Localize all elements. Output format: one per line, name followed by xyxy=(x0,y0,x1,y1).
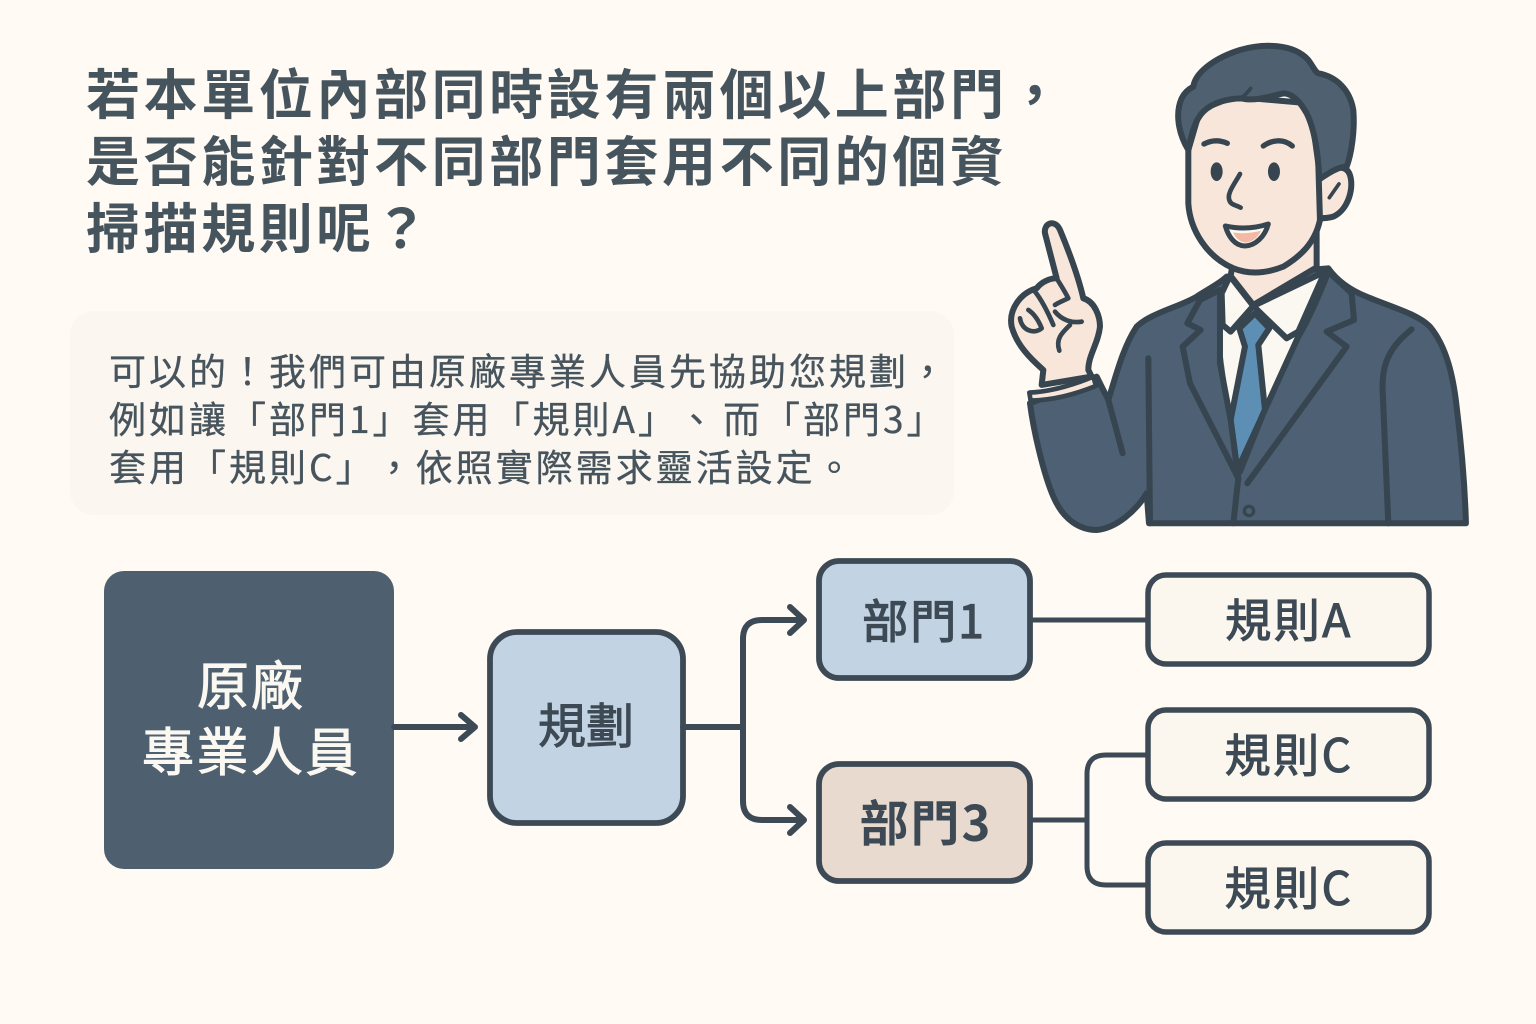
right lapel xyxy=(1240,272,1354,483)
neck xyxy=(1231,230,1317,305)
title xyxy=(86,51,1065,264)
shirt cuff xyxy=(1029,377,1096,401)
connector: department 3 to rules C xyxy=(1030,755,1148,885)
nose xyxy=(1229,174,1241,208)
arrow: staff to planning xyxy=(394,715,475,739)
title: 是否能針對不同部門套用不同的個資 xyxy=(86,118,1008,197)
connector: planning to departments xyxy=(683,607,804,833)
box: rule A xyxy=(1148,575,1429,664)
box: rule C lower xyxy=(1148,843,1429,932)
box: manufacturer staff xyxy=(104,571,394,869)
shirt xyxy=(1222,272,1325,410)
box: department 3: 部門3 xyxy=(860,785,992,856)
jacket button xyxy=(1244,506,1254,516)
jacket seams xyxy=(1108,329,1412,523)
box: department 1 xyxy=(819,561,1030,678)
title: 若本單位內部同時設有兩個以上部門， xyxy=(86,51,1065,130)
answer text: 而「部門3」 xyxy=(723,390,947,444)
box: planning: 規劃 xyxy=(538,687,634,757)
illustration: businessman pointing xyxy=(1011,46,1466,530)
hair xyxy=(1178,46,1354,179)
box: manufacturer staff: 原廠 xyxy=(197,645,305,720)
title: 掃描規則呢？ xyxy=(86,185,432,264)
finger lines xyxy=(1020,278,1082,351)
left lapel xyxy=(1183,290,1238,478)
hand xyxy=(1011,223,1100,385)
jacket xyxy=(1030,268,1466,530)
mouth xyxy=(1225,224,1268,246)
answer text: 可以的！我們可由原廠專業人員先協助您規劃， xyxy=(109,342,949,396)
panel: answer xyxy=(70,311,954,515)
box: planning xyxy=(490,632,683,823)
connector: department 1 to rule A xyxy=(1030,618,1148,622)
box: rule C lower: 規則C xyxy=(1225,853,1353,919)
box: rule A: 規則A xyxy=(1225,585,1353,651)
hair tuft xyxy=(1242,88,1251,98)
box: department 3 xyxy=(819,764,1030,881)
answer text: 例如讓「部門1」套用「規則A」、 xyxy=(109,390,718,444)
answer text xyxy=(109,342,949,492)
box: department 1: 部門1 xyxy=(862,586,986,652)
answer text: 套用「規則C」，依照實際需求靈活設定。 xyxy=(109,438,856,492)
tie xyxy=(1231,313,1269,470)
box: manufacturer staff: 專業人員 xyxy=(142,711,360,786)
box: rule C upper xyxy=(1148,710,1429,799)
eyes xyxy=(1211,162,1223,181)
eyebrows xyxy=(1204,141,1292,146)
collar xyxy=(1222,272,1325,338)
face xyxy=(1188,97,1320,273)
ear xyxy=(1318,168,1351,218)
box: rule C upper: 規則C xyxy=(1225,720,1353,786)
